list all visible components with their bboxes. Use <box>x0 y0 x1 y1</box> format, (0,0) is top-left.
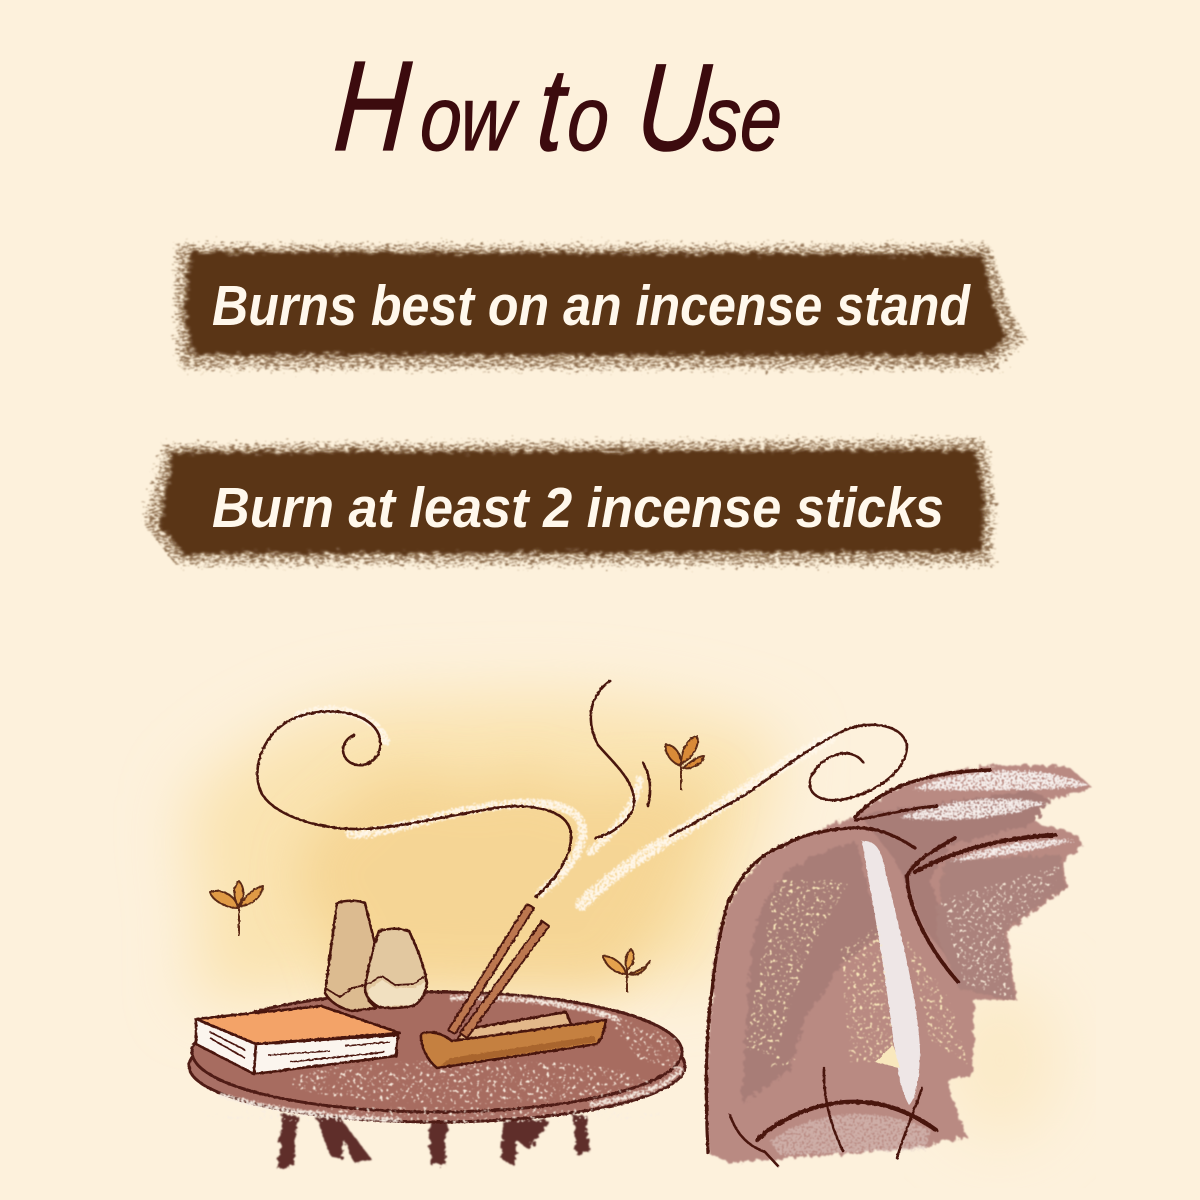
table rim <box>189 1010 685 1122</box>
book left pages <box>196 1019 256 1074</box>
title: o <box>565 66 613 170</box>
blanket base <box>706 765 1092 1163</box>
instruction text 1: Burns best on an incense stand <box>212 274 971 338</box>
instruction banner 1 <box>176 246 1024 368</box>
table <box>189 992 685 1170</box>
vase lower band <box>368 980 425 1006</box>
title: o <box>417 66 466 170</box>
blanket lower pale band <box>770 1114 930 1155</box>
blanket cream speckle <box>745 880 968 1070</box>
book page lines <box>210 1032 390 1062</box>
incense sticks <box>448 904 549 1038</box>
illustration: incense scene <box>188 681 1092 1170</box>
title: w <box>457 66 522 170</box>
smoke chalk trails <box>298 710 830 905</box>
blanket dark shading <box>742 790 1050 1103</box>
book cover <box>196 1006 400 1044</box>
leaf sprig left <box>210 881 263 936</box>
blanket wing speckle <box>940 865 1060 998</box>
book <box>196 1006 400 1074</box>
smoke line curves <box>257 681 907 897</box>
holder back wall <box>455 1012 571 1046</box>
brush fringe 2 <box>145 440 994 564</box>
instruction banner 2 <box>145 440 994 564</box>
blanket <box>706 765 1092 1166</box>
table legs <box>278 1115 590 1170</box>
title: e <box>737 66 786 170</box>
incense holder <box>421 904 606 1068</box>
book front pages <box>254 1035 398 1074</box>
blanket cream patch <box>875 1045 900 1068</box>
brush stroke 2 <box>160 450 984 554</box>
brush stroke 1 <box>184 252 1006 356</box>
tall vase <box>325 901 376 1011</box>
vase glaze lines <box>325 974 427 997</box>
holder body <box>421 1020 606 1068</box>
vases <box>325 901 427 1011</box>
title: t <box>534 43 573 175</box>
blanket outline strokes <box>706 770 1055 1166</box>
blanket center fold highlight <box>862 841 920 1105</box>
title: H <box>330 34 415 178</box>
table top <box>192 992 682 1112</box>
holder front highlight <box>440 1036 596 1066</box>
title: s <box>701 66 745 170</box>
leaf sprig top right <box>666 736 704 790</box>
watercolor wash <box>188 696 1060 1140</box>
blanket chalk highlights <box>900 771 1090 862</box>
brush fringe 1 <box>176 246 1024 368</box>
table chalk rim highlight <box>220 998 682 1120</box>
instruction text 2: Burn at least 2 incense sticks <box>212 476 944 540</box>
blanket wing dark area <box>935 855 1065 1000</box>
leaf sprig bottom <box>603 949 650 992</box>
short vase <box>365 929 427 1008</box>
title: U <box>633 38 715 176</box>
table chalk speckle <box>202 1010 680 1123</box>
